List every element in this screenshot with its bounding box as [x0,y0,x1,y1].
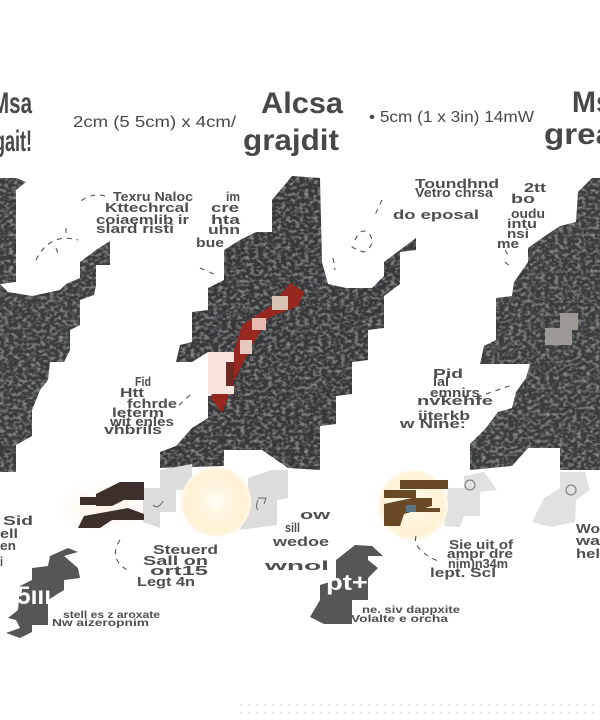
callout: lower right: nim)n34m [448,556,508,571]
callout: lower center: wnol [263,558,329,573]
callout: middle left: vhbrils [104,422,162,437]
callout: top left: uhn [208,222,240,237]
right dog paws [444,472,590,527]
left dog fur [0,178,110,472]
callout: top left: im [226,189,240,204]
callout: lower far left: i [0,554,3,569]
badge right: pt+ [326,570,368,595]
callout: middle right: iiterkb [418,408,470,423]
callout: middle left: Htt [120,385,145,400]
right dog fur [470,178,600,470]
callout: top left: cre [211,200,239,215]
callout: top left [96,189,241,250]
callout: top right: nsi [507,226,529,241]
peach glow behind left toy [55,480,155,532]
badge right caption: ne. siv dappxite [362,604,460,616]
callout: top left: Kttechrcal [105,200,189,215]
callout: middle right: w Nine: [399,416,466,431]
left toy [78,482,144,528]
callout: lower left: ort15 [150,563,208,578]
heading right [544,86,600,151]
callout: lower center: wedoe [272,534,329,549]
callout: far right: Wo [576,521,600,536]
callout: top right [393,176,547,251]
callout: middle left: leterm [112,405,164,420]
callout: middle right: lal [433,374,449,389]
glowing peach disc [181,467,251,537]
badge left caption: Nw aizeropnim [52,617,149,629]
callout: top right: Vetro chrsa [415,185,494,200]
callout: middle right: Pid [433,366,463,381]
callout: top right: intu [507,216,537,231]
callout: middle right: nvkehfe [417,393,493,408]
heading center: Alcsa [261,87,343,120]
callout: lower left [137,542,218,589]
callout: middle left: Fid [135,374,151,389]
callout: far right: hel [576,546,600,561]
badge right caption [351,604,460,625]
callout: lower right: lept. Scl [430,565,496,580]
callout: lower right [430,537,514,580]
callout: top right: me [497,236,519,251]
callout: lower far left: Sid [3,513,33,528]
callout: far right: wa [575,533,600,548]
callout: middle left: fchrde [127,396,177,411]
callout: lower far left: ell [0,526,18,541]
badge left caption: stell es z aroxate [63,609,160,621]
callout: top left: hta [211,212,241,227]
callout: lower right: Sie uit of [449,537,514,552]
callout: lower center [263,507,331,573]
size label right: • 5cm (1 x 3in) 14mW [369,109,535,126]
badge right caption: Volalte e orcha [351,613,448,625]
callout: top left: Texru Naloc [113,189,193,204]
callout: top right: oudu [511,206,545,221]
callout: middle right: emnirs [430,385,480,400]
callout: top right: 2tt [524,180,547,195]
callout: lower center: ow [300,507,331,522]
callout: middle left [104,374,177,437]
callout: lower far left [0,513,33,569]
badge left: 5ııı [17,582,51,610]
callout: middle right [399,366,493,431]
heading center [243,87,343,157]
callout: lower right: ampr dre [447,546,513,561]
heading left [0,87,32,158]
callout: top left: bue [196,235,224,250]
callout: top right: bo [511,191,535,206]
badge left caption [52,609,160,629]
callout: top right: Toundhnd [415,176,499,191]
callout: lower left: Sall on [143,553,208,568]
callout: top left: coiaemlib ir [96,212,189,227]
size label left: 2cm (5 5cm) x 4cm/ [73,114,237,131]
plaid patch [545,313,578,345]
heading center: grajdit [243,124,339,157]
center dog fur [160,176,416,470]
callout: lower center: sill [285,520,300,535]
callout: lower left: Steuerd [153,542,218,557]
leader dashes [36,195,512,570]
right toy [384,480,448,526]
badge right [310,545,383,624]
callout: lower far left: en [0,538,16,553]
callout: middle left: wit enles [109,414,174,429]
badge left [6,548,80,638]
callout: far right [575,521,600,561]
callout: lower left: Legt 4n [137,574,195,589]
callout: top right: do eposal [393,207,479,222]
cream disc [378,470,448,540]
center dog paws [143,464,288,530]
callout: top left: slard risti [96,221,174,236]
plaid scarf [208,283,304,413]
